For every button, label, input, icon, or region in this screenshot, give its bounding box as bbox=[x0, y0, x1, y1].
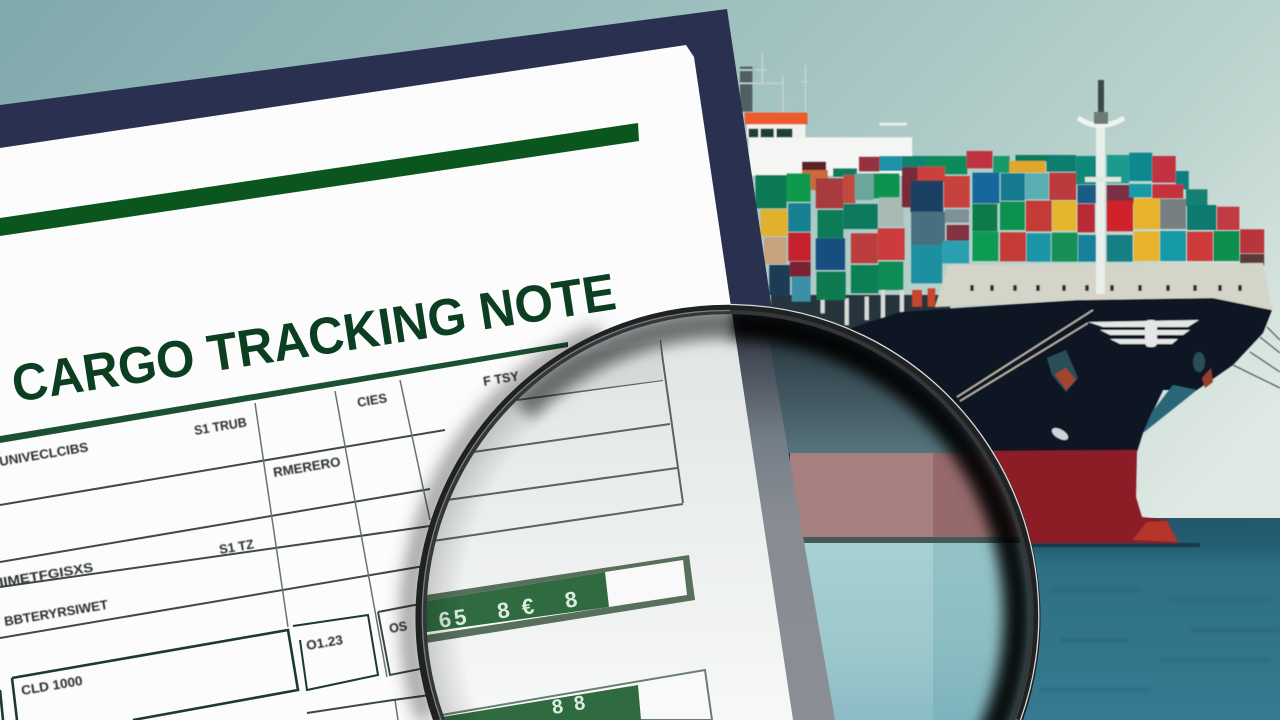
label: CLD 1000 bbox=[20, 673, 84, 698]
green status box one: 65 8 € 8 bbox=[437, 586, 579, 633]
blurred hull in lens bbox=[732, 314, 982, 453]
paper in lens bbox=[428, 314, 793, 720]
green status box one bbox=[420, 555, 695, 644]
green status box two bbox=[430, 670, 712, 720]
lens waterline bbox=[803, 537, 1020, 543]
bottom row line bbox=[307, 695, 430, 713]
enlarged table bbox=[433, 340, 683, 541]
anchor left bbox=[1047, 350, 1078, 392]
label: IIMETFGISXS bbox=[0, 559, 95, 590]
ring highlight right bbox=[730, 304, 1039, 720]
magnifier shadow bbox=[410, 333, 600, 720]
ring highlight left bbox=[422, 310, 730, 720]
container ship bbox=[740, 53, 1280, 547]
ship mast bbox=[1078, 80, 1124, 294]
ropes bbox=[1233, 327, 1280, 388]
deck base and lashing posts bbox=[771, 288, 950, 332]
green status box two: 8 8 bbox=[550, 692, 587, 719]
magnifier ring bbox=[419, 304, 1039, 720]
label: RMERERO bbox=[272, 454, 342, 480]
magnifying lens view bbox=[400, 300, 1050, 720]
second small box bbox=[378, 603, 425, 675]
label: UNIVECLCIBS bbox=[0, 439, 90, 469]
board in lens bbox=[736, 340, 835, 720]
blurred sea in lens bbox=[804, 543, 1034, 720]
waterline shadow bbox=[1030, 543, 1200, 547]
clipboard board bbox=[0, 9, 833, 720]
anchor right bbox=[1193, 352, 1213, 388]
title rule bbox=[0, 342, 568, 443]
small bordered box bbox=[293, 615, 378, 690]
label: CIES bbox=[356, 390, 388, 410]
sea bbox=[800, 518, 1280, 720]
table rows bbox=[0, 430, 445, 638]
white mark bbox=[1050, 426, 1070, 442]
lens inner edge shadow bbox=[730, 325, 1018, 720]
ship superstructure bbox=[740, 53, 912, 176]
label: F TSY bbox=[482, 368, 520, 389]
paper document bbox=[0, 45, 792, 720]
ship deck bulwark bbox=[935, 263, 1272, 310]
label: O1.23 bbox=[305, 632, 344, 653]
label: BBTERYRSIWET bbox=[3, 597, 109, 629]
mooring line bbox=[957, 310, 1093, 401]
wing emblem bbox=[1088, 320, 1199, 347]
lens rim shading bbox=[410, 300, 1050, 720]
label: S1 TZ bbox=[218, 536, 255, 557]
blurred red hull in lens bbox=[790, 453, 933, 537]
shaded table header bbox=[518, 340, 663, 399]
table labels bbox=[0, 368, 520, 698]
sea ripples bbox=[1040, 530, 1280, 690]
ship hull bbox=[800, 298, 1272, 456]
large bordered box bbox=[0, 630, 298, 720]
bow reflection bbox=[1143, 385, 1197, 433]
ring body bbox=[435, 511, 1017, 720]
red lower hull bbox=[800, 450, 1178, 543]
label: S1 TRUB bbox=[193, 414, 248, 438]
lens shadow over paper bbox=[523, 325, 730, 410]
label: OS bbox=[388, 618, 409, 636]
blurred red hull right segment bbox=[933, 453, 1019, 537]
title: CARGO TRACKING NOTE bbox=[8, 263, 620, 414]
green header bar bbox=[0, 123, 639, 236]
bulbous bow highlight bbox=[1132, 521, 1178, 542]
ring inner band bbox=[424, 312, 1032, 720]
darker sea segment bbox=[933, 543, 1018, 720]
ring stroke bbox=[419, 308, 1037, 720]
tracking table bbox=[0, 380, 445, 720]
table columns bbox=[255, 380, 430, 720]
cargo containers bbox=[755, 151, 1264, 302]
